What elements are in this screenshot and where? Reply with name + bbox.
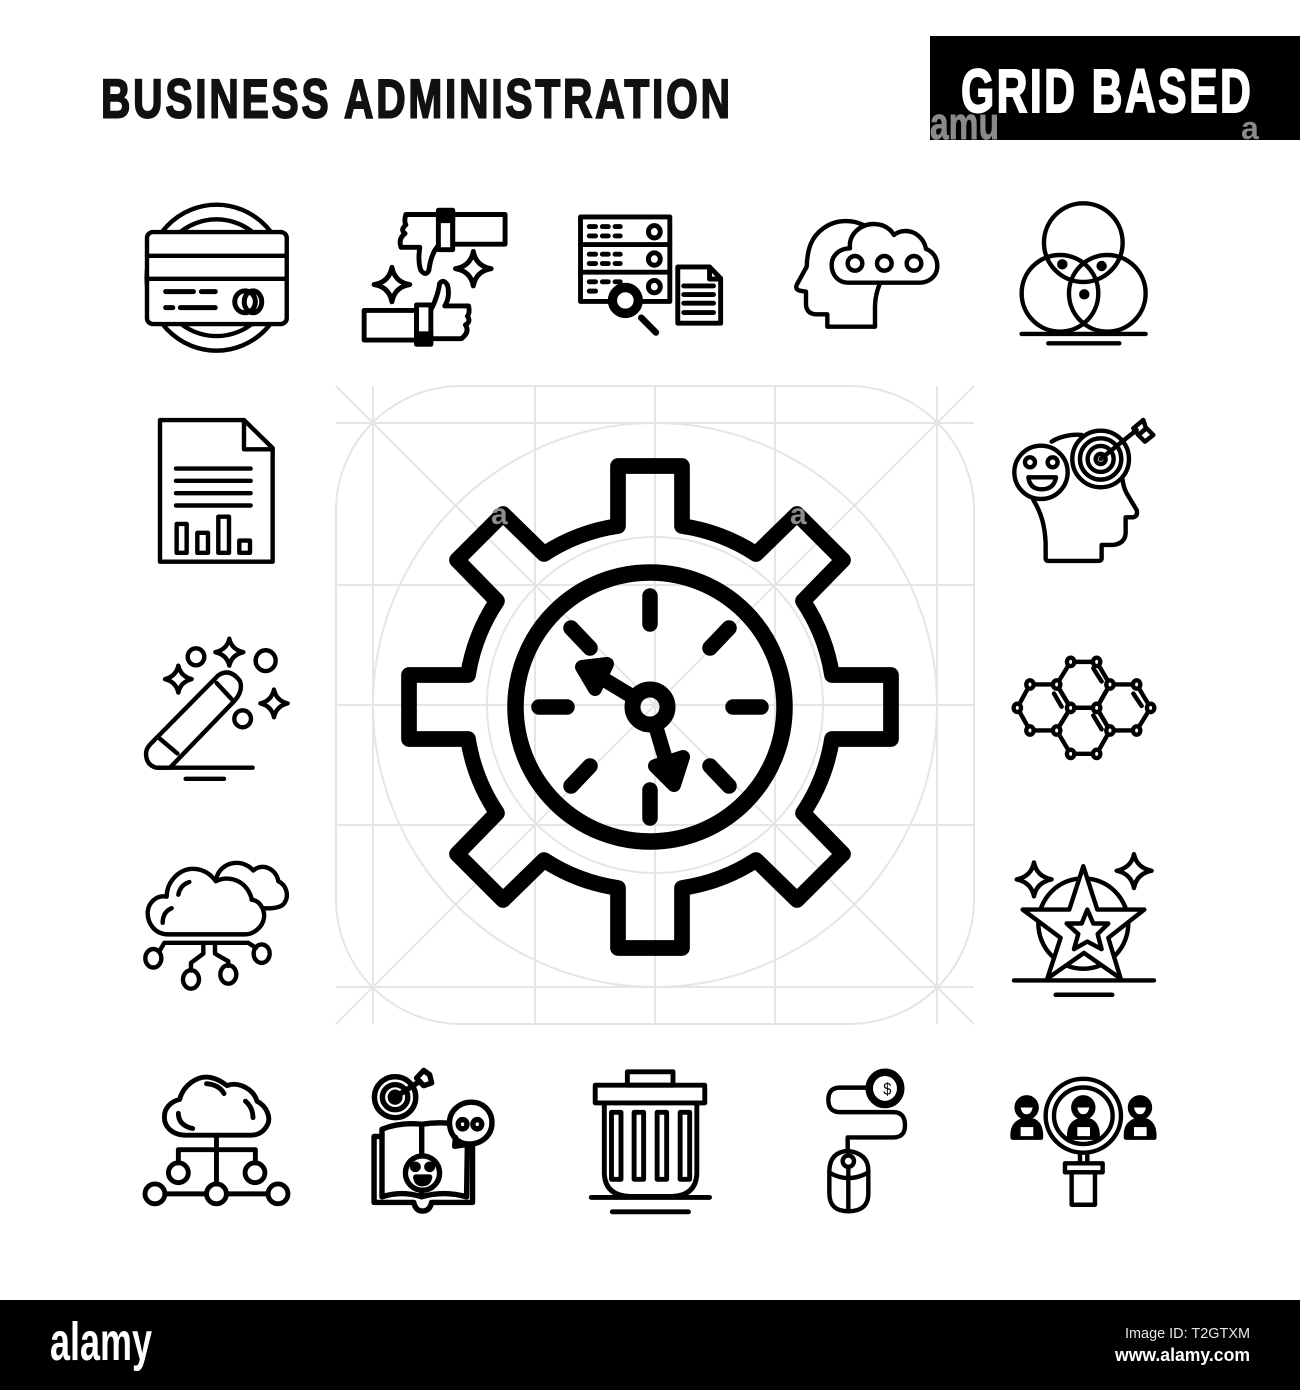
icon: mouse with dollar coin xyxy=(828,1071,905,1211)
icon: venn diagram xyxy=(1022,203,1146,343)
central icon: gear with clock xyxy=(409,466,891,948)
icon: star with sparkles xyxy=(1014,854,1154,995)
footer bar xyxy=(0,1300,1300,1390)
icon: cloud network xyxy=(145,1077,288,1204)
watermark letters over gear xyxy=(491,498,807,531)
icon: trash can xyxy=(591,1072,710,1212)
watermark letters over gear: a xyxy=(491,498,508,531)
icon: pencil with sparkles xyxy=(146,639,288,779)
icon: hexagon molecule xyxy=(1014,658,1154,758)
icon: head with smiley and target xyxy=(1014,420,1153,561)
icon: document with bar chart xyxy=(160,420,273,562)
title: BUSINESS ADMINISTRATION xyxy=(101,69,730,130)
website: www.alamy.com xyxy=(1114,1345,1250,1365)
icon: credit card xyxy=(147,205,287,351)
icon: clouds with network xyxy=(145,863,287,989)
icon: server with document and magnifier xyxy=(581,217,721,333)
watermark letters over gear: a xyxy=(790,498,807,531)
icon: mouse with dollar coin: $ xyxy=(883,1081,892,1099)
icon: magnifier searching people xyxy=(1013,1079,1154,1205)
icon construction grid xyxy=(336,386,974,1024)
badge: grid based: amu xyxy=(930,98,999,149)
icon: head with cloud xyxy=(796,221,937,327)
icon: thumbs up and down xyxy=(364,210,505,344)
badge: grid based xyxy=(930,36,1300,149)
icon: book with target and speech bubble xyxy=(374,1070,492,1211)
badge: grid based: a xyxy=(1241,110,1259,146)
footer logo: alamy xyxy=(50,1312,152,1372)
badge: grid based: GRID BASED xyxy=(961,58,1251,126)
image id: Image ID: T2GTXM xyxy=(1125,1325,1250,1342)
